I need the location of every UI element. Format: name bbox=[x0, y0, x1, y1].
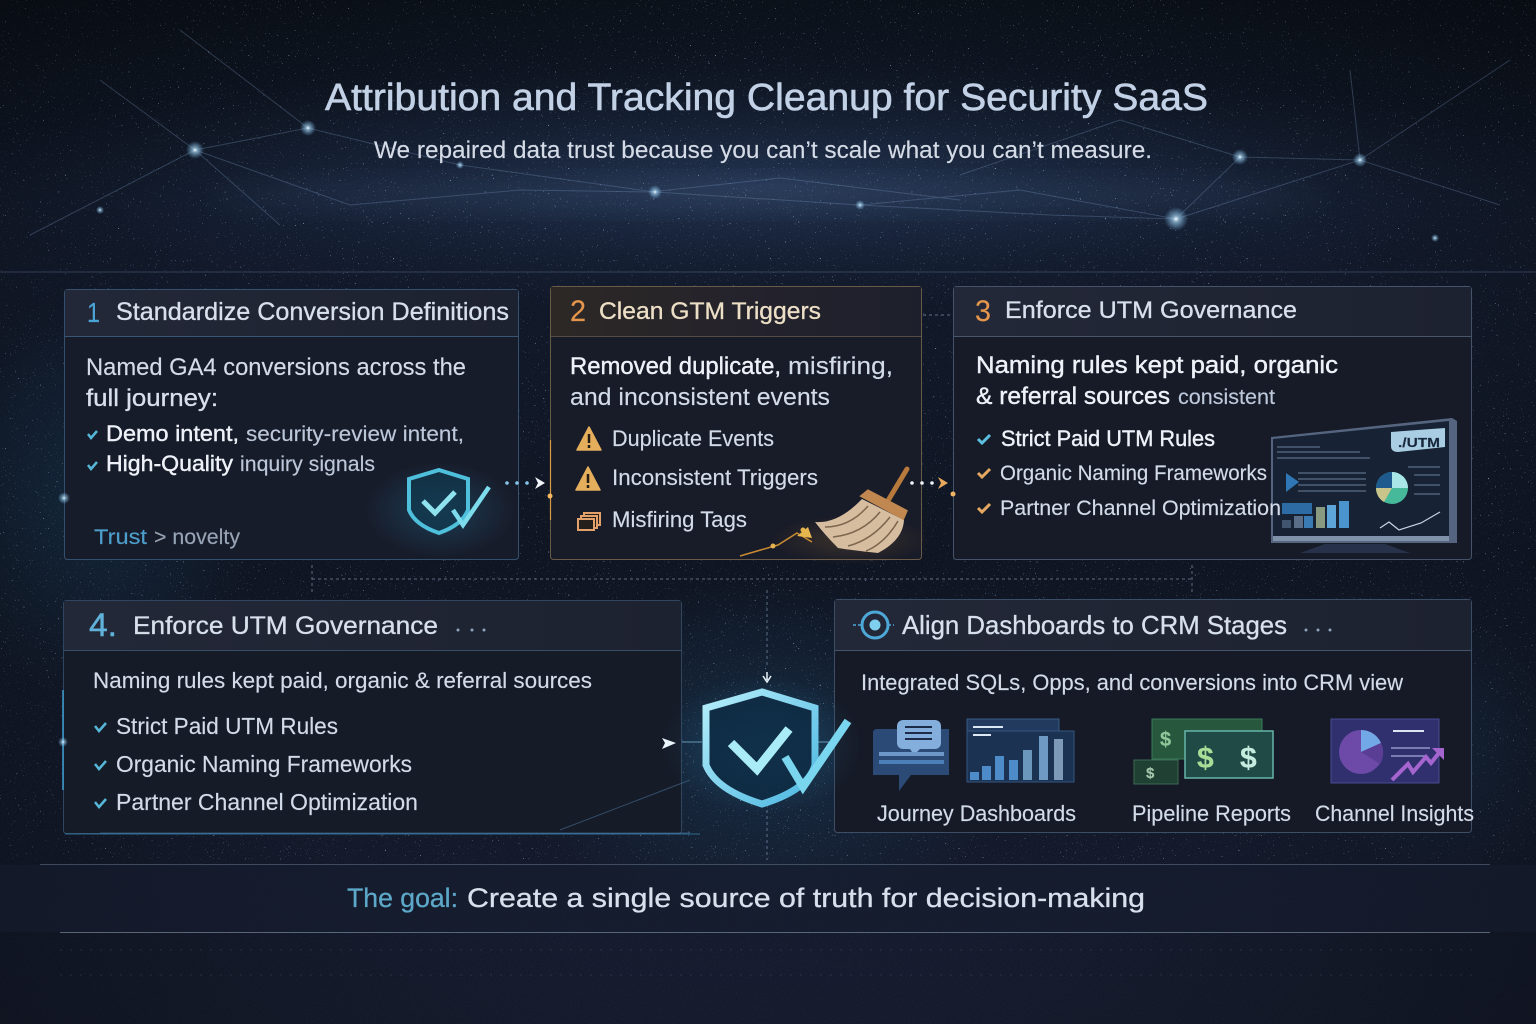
central glow bbox=[662, 675, 862, 815]
icon: utm monitor: ./UTM bbox=[1398, 435, 1440, 450]
label: channel insights: Channel Insights bbox=[1315, 801, 1474, 826]
intro text 3: consistent bbox=[1178, 386, 1275, 409]
list item: misfiring tags: Misfiring Tags bbox=[612, 507, 747, 532]
icon: shield check small bbox=[409, 470, 489, 533]
list item: inconsistent triggers: Inconsistent Triggers bbox=[612, 465, 818, 490]
heading 5: Align Dashboards to CRM Stages bbox=[902, 610, 1287, 640]
intro text 3 bbox=[976, 352, 1338, 410]
goal text: Create a single source of truth for decision-making bbox=[467, 883, 1145, 913]
list item: strict paid utm rules: Strict Paid UTM Rules bbox=[116, 713, 338, 739]
icon: pipeline reports: $ bbox=[1197, 742, 1214, 775]
panel: step 2 clean gtm triggers bbox=[548, 286, 930, 565]
list item: demo intent bbox=[88, 421, 464, 446]
footer band bbox=[0, 834, 1536, 932]
goal text: The goal: bbox=[347, 883, 458, 913]
heading 4: Enforce UTM Governance bbox=[133, 612, 438, 640]
intro text 2 bbox=[570, 353, 893, 411]
panel: step 4 enforce utm governance bbox=[58, 600, 690, 834]
heading 2: Clean GTM Triggers bbox=[599, 298, 821, 325]
list item: demo intent: Demo intent, bbox=[106, 421, 239, 446]
intro text 2: and inconsistent events bbox=[570, 384, 830, 411]
label: journey dashboards: Journey Dashboards bbox=[877, 801, 1076, 826]
label: pipeline reports: Pipeline Reports bbox=[1132, 801, 1291, 826]
heading 1: Standardize Conversion Definitions bbox=[116, 298, 509, 326]
icon: broom bbox=[740, 469, 907, 556]
list item: partner channel optimization: Partner Channel Optimization bbox=[1000, 497, 1281, 520]
step number 1: 1 bbox=[87, 297, 100, 328]
list item: inquiry signals: High-Quality bbox=[106, 451, 233, 476]
icon: pipeline reports: $ bbox=[1146, 765, 1155, 782]
arrow: step 1 to 2 bbox=[505, 477, 545, 489]
icon: pipeline reports: $ bbox=[1160, 729, 1171, 751]
step number 3: 3 bbox=[975, 295, 991, 328]
intro text 3: Naming rules kept paid, organic bbox=[976, 352, 1338, 379]
list item: organic naming frameworks: Organic Naming Frameworks bbox=[116, 751, 412, 777]
intro text 1: full journey: bbox=[86, 385, 218, 412]
arrow: step 2 to 3 bbox=[910, 477, 948, 489]
icon: target bbox=[853, 612, 894, 638]
list item: demo intent: security-review intent, bbox=[246, 423, 464, 446]
icon: pipeline reports: $ bbox=[1240, 742, 1257, 775]
panel: step 3 enforce utm governance bbox=[950, 286, 1472, 560]
icon: pipeline reports bbox=[1134, 719, 1273, 784]
list item: inquiry signals: inquiry signals bbox=[240, 453, 375, 476]
note: trust over novelty: Trust bbox=[94, 526, 147, 549]
intro text 4: Naming rules kept paid, organic & referral sources bbox=[93, 668, 592, 693]
intro text 2: Removed duplicate, bbox=[570, 353, 781, 380]
step number 4: 4. bbox=[89, 607, 117, 643]
panel: align dashboards to crm stages bbox=[834, 600, 1474, 832]
network constellation bbox=[0, 30, 1536, 272]
list item: partner channel optimization: Partner Channel Optimization bbox=[116, 789, 418, 815]
connectors bbox=[312, 315, 1192, 860]
list item: inquiry signals bbox=[88, 451, 375, 476]
note: trust over novelty bbox=[94, 526, 241, 549]
intro text 1 bbox=[86, 354, 466, 412]
intro text 3: & referral sources bbox=[976, 383, 1170, 410]
heading 3: Enforce UTM Governance bbox=[1005, 297, 1297, 324]
list item: strict paid utm rules: Strict Paid UTM Rules bbox=[1001, 426, 1215, 451]
intro text 2: misfiring, bbox=[788, 353, 893, 380]
panel: step 1 standardize conversion definitions bbox=[58, 290, 518, 560]
icon: journey dashboards bbox=[873, 719, 1074, 791]
icon: utm monitor bbox=[1271, 418, 1457, 553]
step number 2: 2 bbox=[570, 295, 586, 328]
subtitle: We repaired data trust because you can’t scale what you can’t measure. bbox=[374, 137, 1152, 164]
note: trust over novelty: > novelty bbox=[154, 526, 241, 549]
list item: duplicate events: Duplicate Events bbox=[612, 426, 774, 451]
list item: organic naming frameworks: Organic Naming Frameworks bbox=[1000, 462, 1267, 485]
icon: central shield check bbox=[662, 672, 848, 804]
intro text 1: Named GA4 conversions across the bbox=[86, 354, 466, 381]
title: Attribution and Tracking Cleanup for Security SaaS bbox=[325, 77, 1208, 119]
intro text 5: Integrated SQLs, Opps, and conversions into CRM view bbox=[861, 670, 1403, 695]
icon: channel insights bbox=[1331, 719, 1444, 783]
